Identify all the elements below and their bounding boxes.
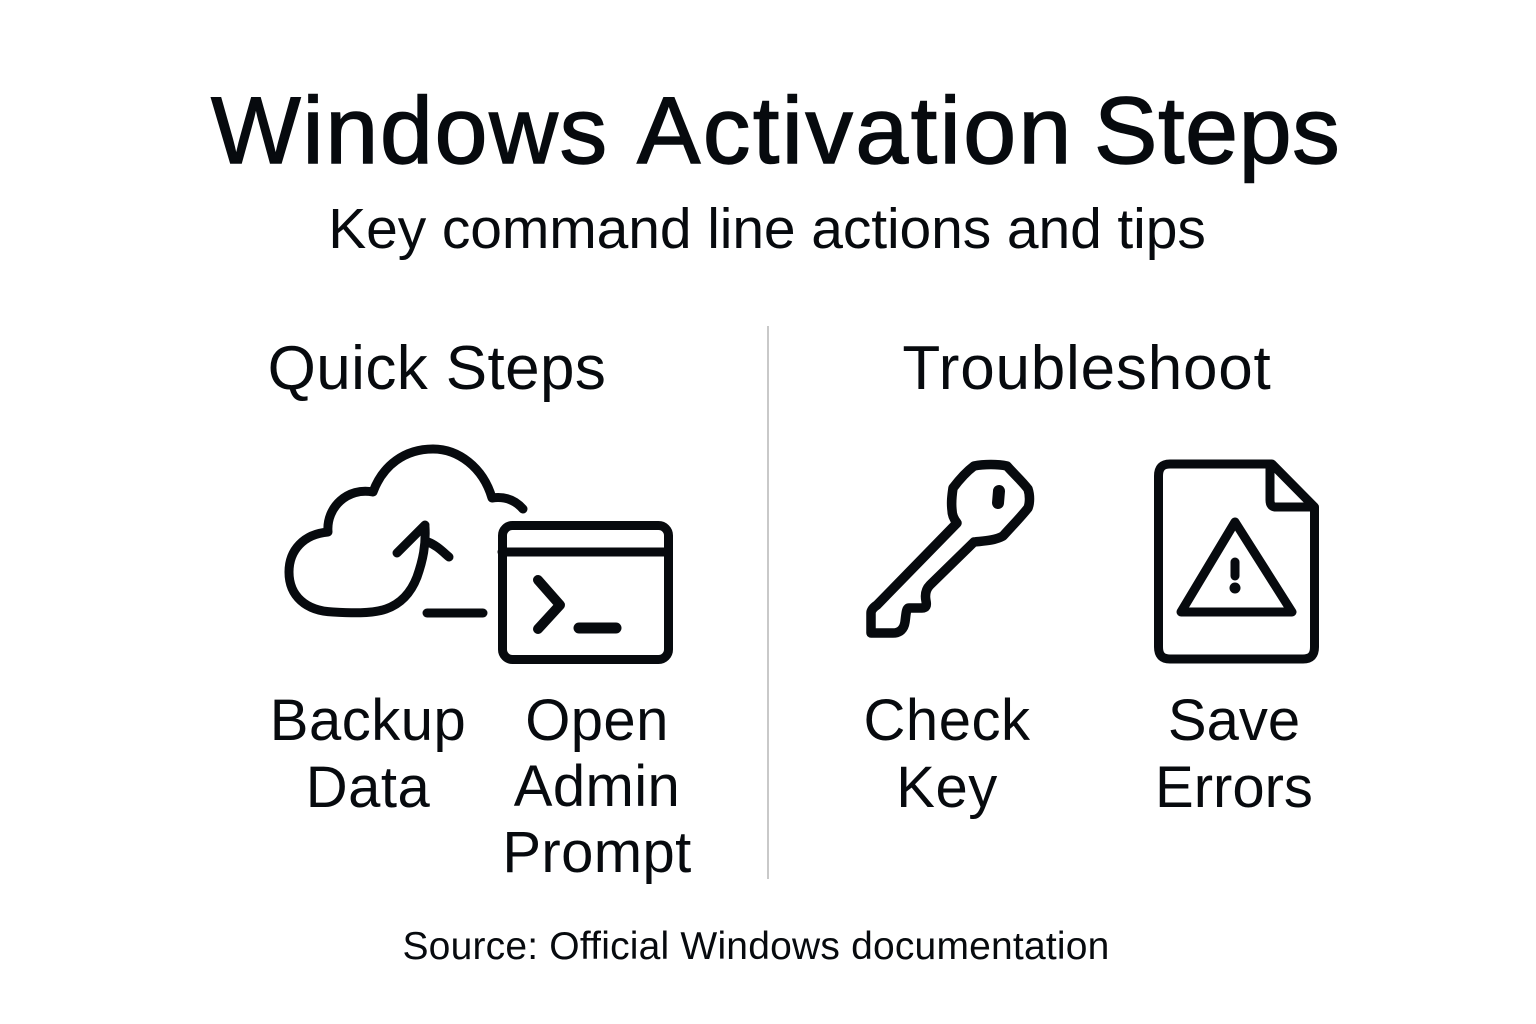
subtitle: Key command line actions and tips [328,197,1206,261]
vertical divider [767,326,769,879]
label: Backup Data: Backup [270,688,466,753]
label: Open Admin Prompt: Open [525,688,669,753]
label: Save Errors [1155,688,1313,820]
icon: cloud upload [284,444,528,618]
label: Save Errors: Errors [1155,755,1313,820]
icon: key [866,460,1034,638]
label: Backup Data [270,688,466,820]
label: Open Admin Prompt: Prompt [502,820,692,885]
label: Open Admin Prompt [502,688,692,885]
title: Steps [1094,78,1340,184]
label: Check Key [864,688,1030,820]
label: Backup Data: Data [306,755,430,820]
heading: Quick Steps: Quick Steps [268,334,606,403]
source note: Source: Official Windows documentation [402,925,1110,968]
icon: terminal window [498,521,673,664]
title: Windows [211,78,609,184]
title [210,78,1340,184]
label: Save Errors: Save [1168,688,1300,753]
title: Activation [637,78,1074,184]
label: Check Key: Check [864,688,1030,753]
label: Open Admin Prompt: Admin [514,754,680,819]
heading: Troubleshoot: Troubleshoot [902,334,1272,403]
label: Check Key: Key [896,755,998,820]
icon: document with warning [1154,460,1319,664]
